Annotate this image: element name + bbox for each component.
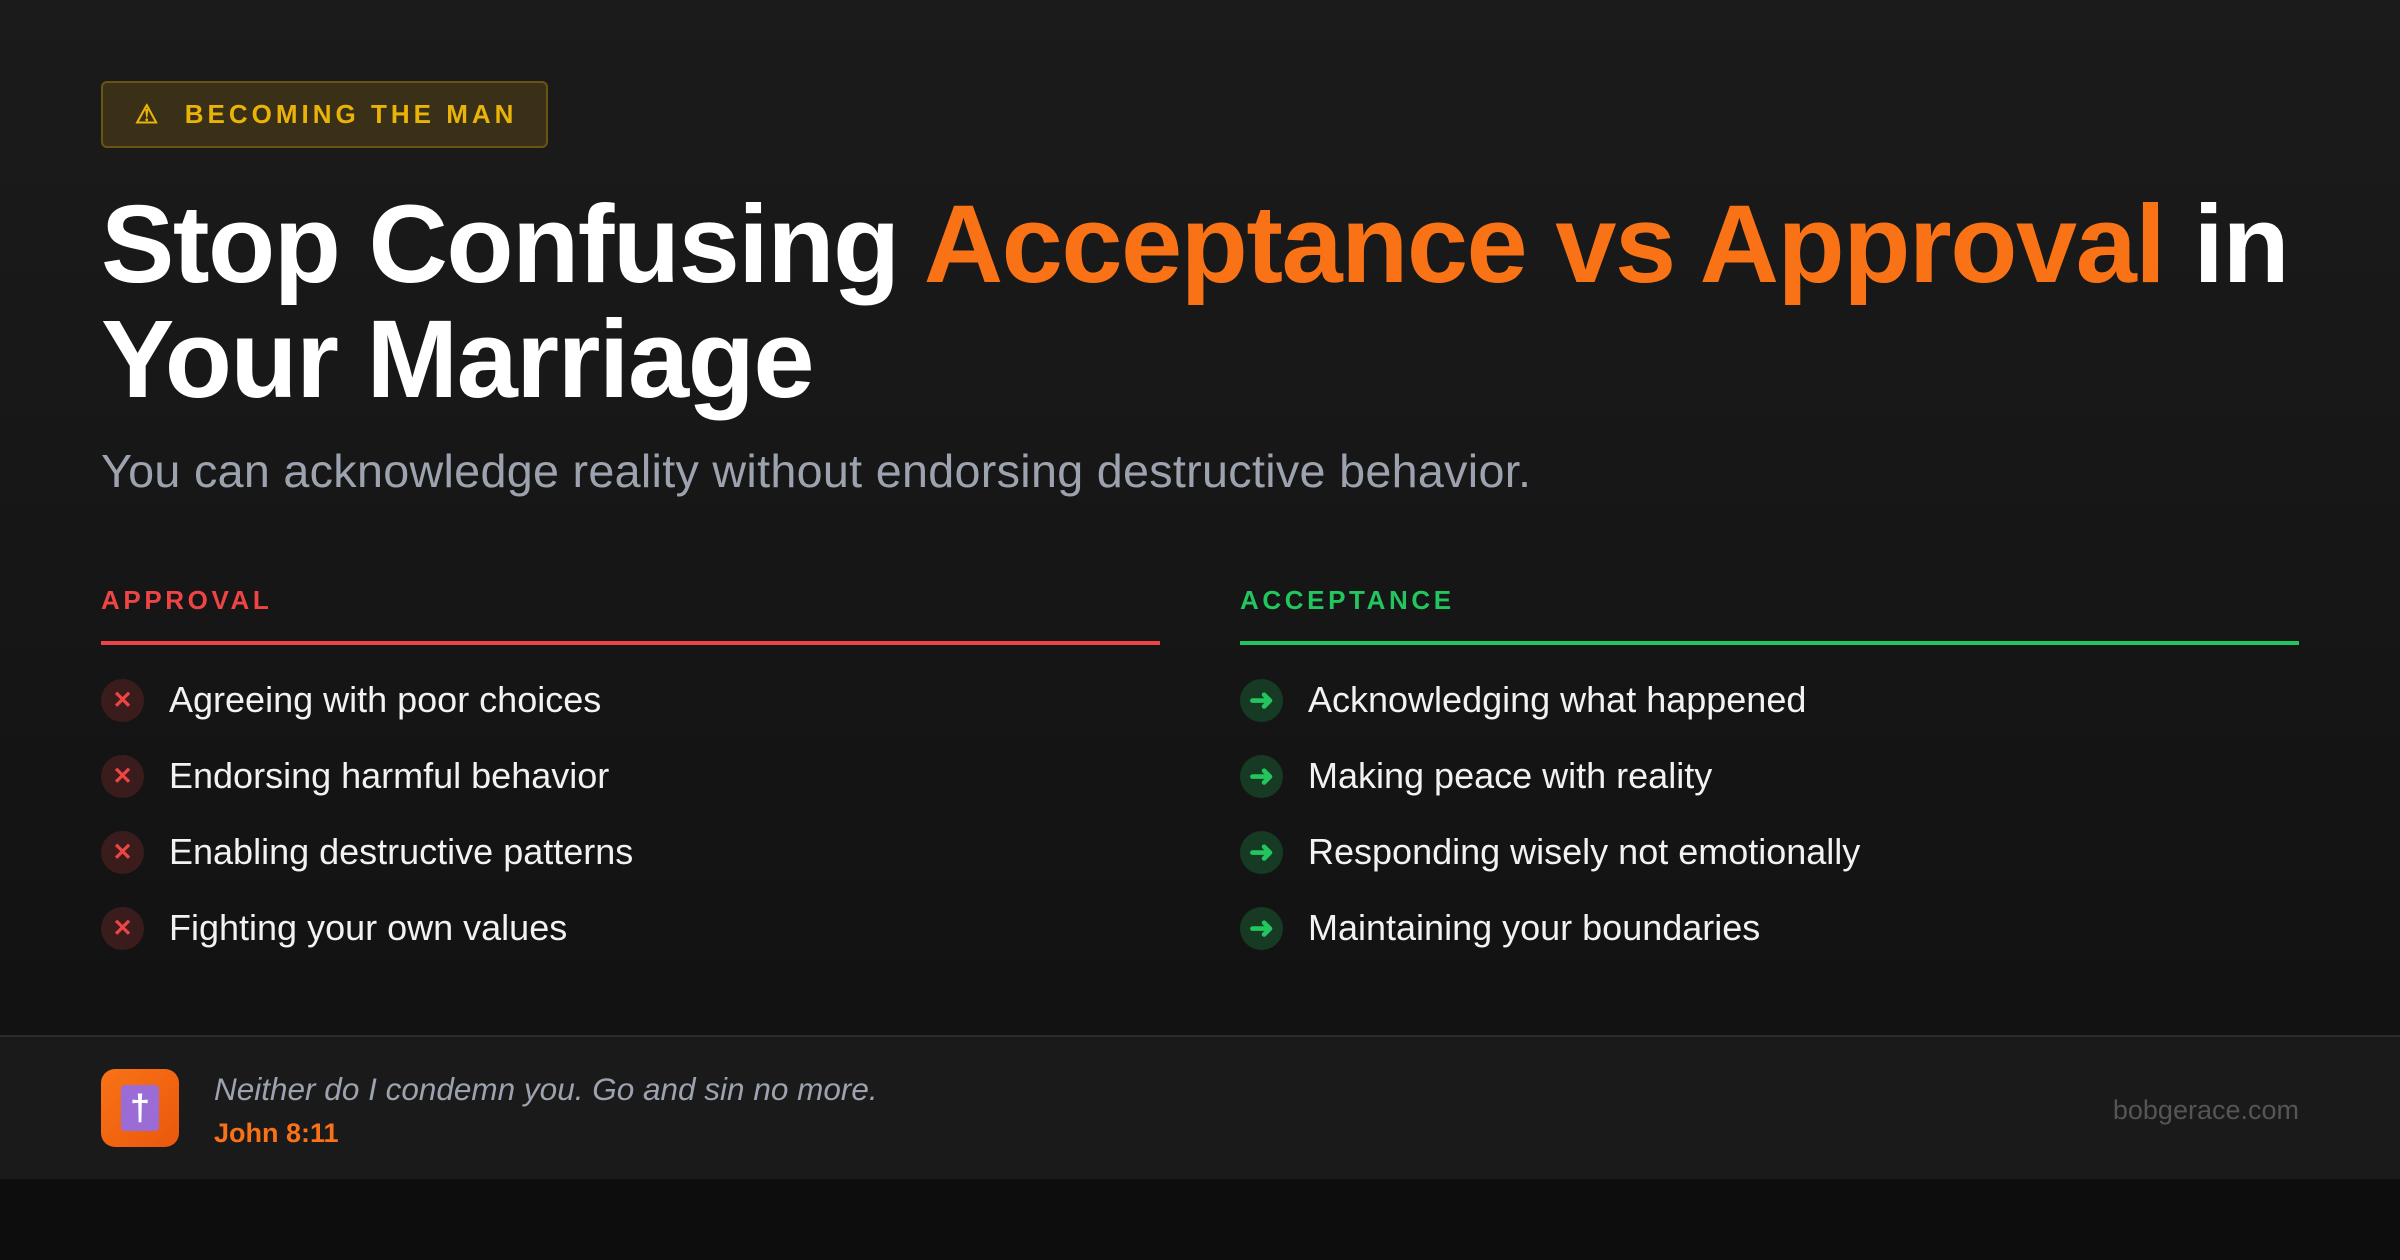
quote: Neither do I condemn you. Go and sin no more.: [214, 1071, 878, 1107]
item: fighting: ✕: [112, 914, 133, 942]
title: [101, 183, 2288, 421]
item: enabling: Enabling destructive patterns: [169, 831, 633, 872]
item: making peace: Making peace with reality: [1308, 755, 1712, 796]
title: Your Marriage: [101, 298, 813, 421]
item: fighting: Fighting your own values: [169, 907, 567, 948]
badge: ⚠ BECOMING THE MAN: [135, 99, 517, 129]
heading: acceptance: ACCEPTANCE: [1240, 585, 1455, 615]
website: bobgerace.com: [2113, 1095, 2299, 1125]
item: agreeing: ✕: [112, 686, 133, 714]
subtitle: You can acknowledge reality without endorsing destructive behavior.: [101, 445, 1531, 497]
icon: cross: †: [130, 1087, 150, 1128]
item: acknowledging: Acknowledging what happened: [1308, 679, 1806, 720]
item: agreeing: Agreeing with poor choices: [169, 679, 601, 720]
item: boundaries: Maintaining your boundaries: [1308, 907, 1760, 948]
item: endorsing: Endorsing harmful behavior: [169, 755, 609, 796]
item: making peace: ➜: [1249, 760, 1274, 792]
item: responding: ➜: [1249, 836, 1274, 868]
item: responding: Responding wisely not emotionally: [1308, 831, 1860, 872]
badge: [101, 81, 548, 148]
footer: [0, 1035, 2400, 1179]
item: boundaries: ➜: [1249, 912, 1274, 944]
panel: acceptance: [1240, 585, 2299, 950]
item: endorsing: ✕: [112, 762, 133, 790]
item: acknowledging: ➜: [1249, 684, 1274, 716]
title: Stop Confusing Acceptance vs Approval in: [101, 183, 2288, 306]
heading: approval: APPROVAL: [101, 585, 272, 615]
item: enabling: ✕: [112, 838, 133, 866]
reference: John 8:11: [214, 1118, 339, 1148]
panel: approval: [101, 585, 1160, 950]
icon: cross: [101, 1069, 179, 1147]
